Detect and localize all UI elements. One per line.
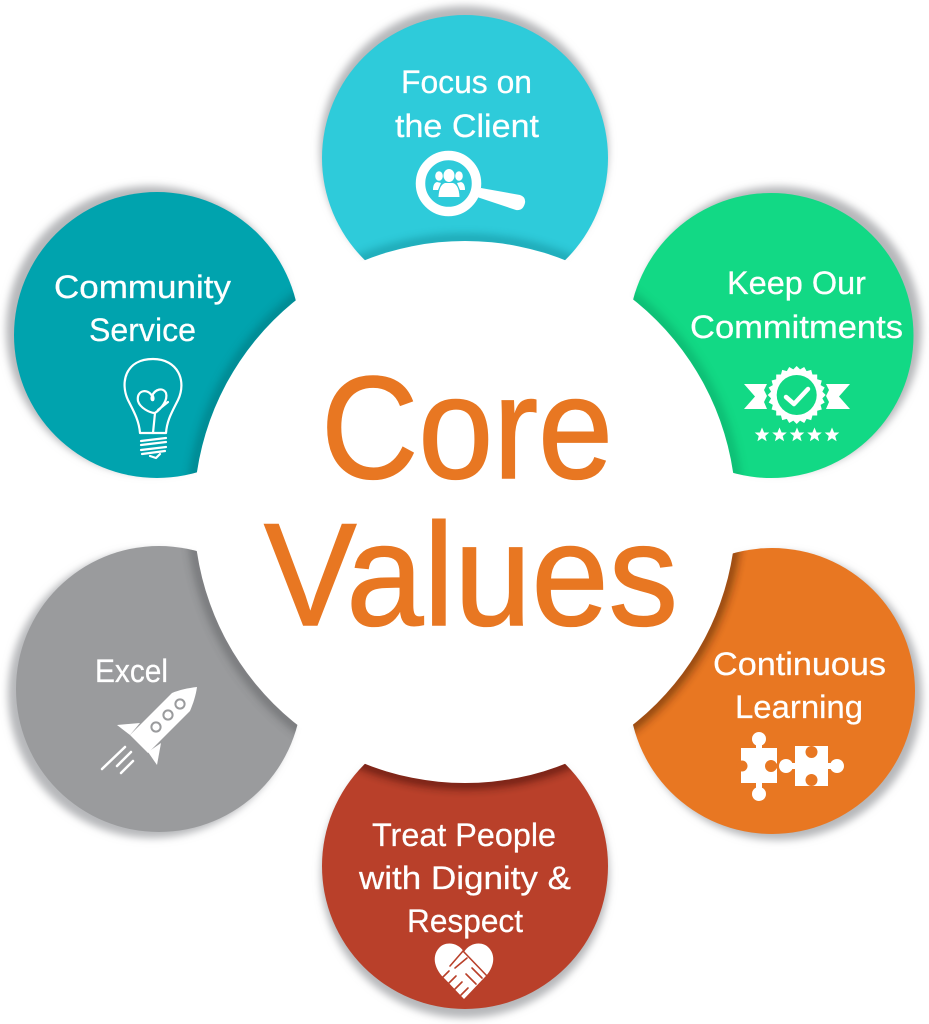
icon: rocket <box>102 687 197 773</box>
panel: Continuous Learning <box>632 548 926 844</box>
label: Treat People with Dignity and Respect: with Dignity & <box>358 860 571 896</box>
icon: two puzzle pieces <box>736 732 844 801</box>
panel: Focus on the Client <box>316 2 612 260</box>
title: Core Values: Values <box>264 493 678 656</box>
label: Community Service: Community <box>54 269 231 305</box>
label: Focus on the Client: the Client <box>395 108 539 144</box>
label: Continuous Learning: Continuous <box>713 646 886 682</box>
icon: rosette with check mark and five stars <box>744 366 850 441</box>
panel: Excel <box>4 546 298 842</box>
icon: light bulb with heart filament <box>125 359 181 458</box>
label: Community Service: Service <box>89 312 196 348</box>
label: Excel: Excel <box>95 653 168 689</box>
center circle <box>194 241 736 783</box>
label: Keep Our Commitments: Keep Our <box>727 265 866 301</box>
label: Focus on the Client: Focus on <box>401 64 532 100</box>
icon: handshake inside heart <box>435 943 493 999</box>
icon: magnifying glass over people <box>420 156 525 212</box>
panel: Treat People with Dignity and Respect <box>316 764 614 1022</box>
panel: Keep Our Commitments <box>633 182 926 478</box>
label: Continuous Learning: Learning <box>735 689 863 725</box>
label: Keep Our Commitments: Commitments <box>690 309 903 345</box>
panel: Community Service <box>2 182 296 478</box>
label: Treat People with Dignity and Respect: Treat People <box>372 817 556 853</box>
title: Core Values: Core <box>321 346 613 509</box>
label: Treat People with Dignity and Respect: Respect <box>407 903 523 939</box>
